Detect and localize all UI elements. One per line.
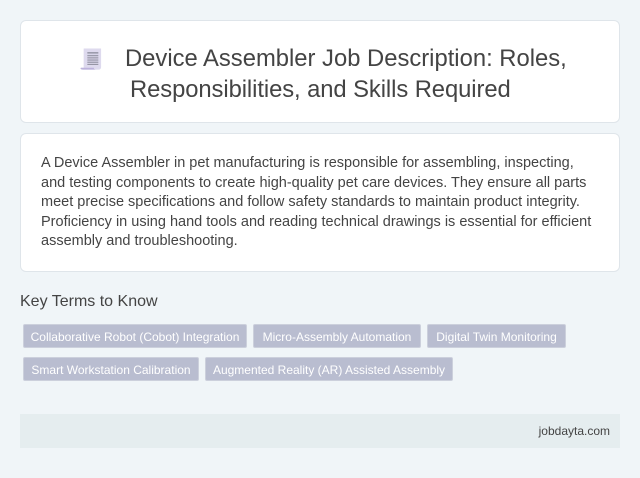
- tag: Digital Twin Monitoring: [436, 330, 557, 344]
- footer bar: [20, 414, 620, 448]
- description text: assembly and troubleshooting.: [41, 233, 238, 249]
- footer source: jobdayta.com: [539, 424, 610, 438]
- title: [125, 45, 567, 103]
- description text: [41, 155, 592, 249]
- tag: [253, 324, 421, 348]
- panel: title card: [20, 20, 620, 123]
- title: Device Assembler Job Description: Roles,: [125, 45, 567, 72]
- heading: key terms: Key Terms to Know: [20, 293, 158, 310]
- title: Responsibilities, and Skills Required: [130, 76, 511, 103]
- tag: [205, 357, 453, 381]
- tag: [23, 357, 199, 381]
- panel: key term tags: [23, 324, 566, 381]
- description text: Proficiency in using hand tools and reading technical drawings is essential for efficient: [41, 214, 591, 230]
- tag: Augmented Reality (AR) Assisted Assembly: [213, 363, 445, 377]
- description text: A Device Assembler in pet manufacturing is responsible for assembling, inspecting,: [41, 155, 574, 171]
- icon: document: [80, 48, 101, 70]
- tag: Collaborative Robot (Cobot) Integration: [31, 330, 239, 344]
- tag: [23, 324, 247, 348]
- tag: Micro-Assembly Automation: [263, 330, 411, 344]
- description text: meet precise specifications and follow safety standards to maintain product integrity.: [41, 194, 580, 210]
- tag: [427, 324, 566, 348]
- description text: and testing components to create high-quality pet care devices. They ensure all parts: [41, 175, 586, 191]
- tag: Smart Workstation Calibration: [31, 363, 191, 377]
- panel: description card: [20, 133, 620, 272]
